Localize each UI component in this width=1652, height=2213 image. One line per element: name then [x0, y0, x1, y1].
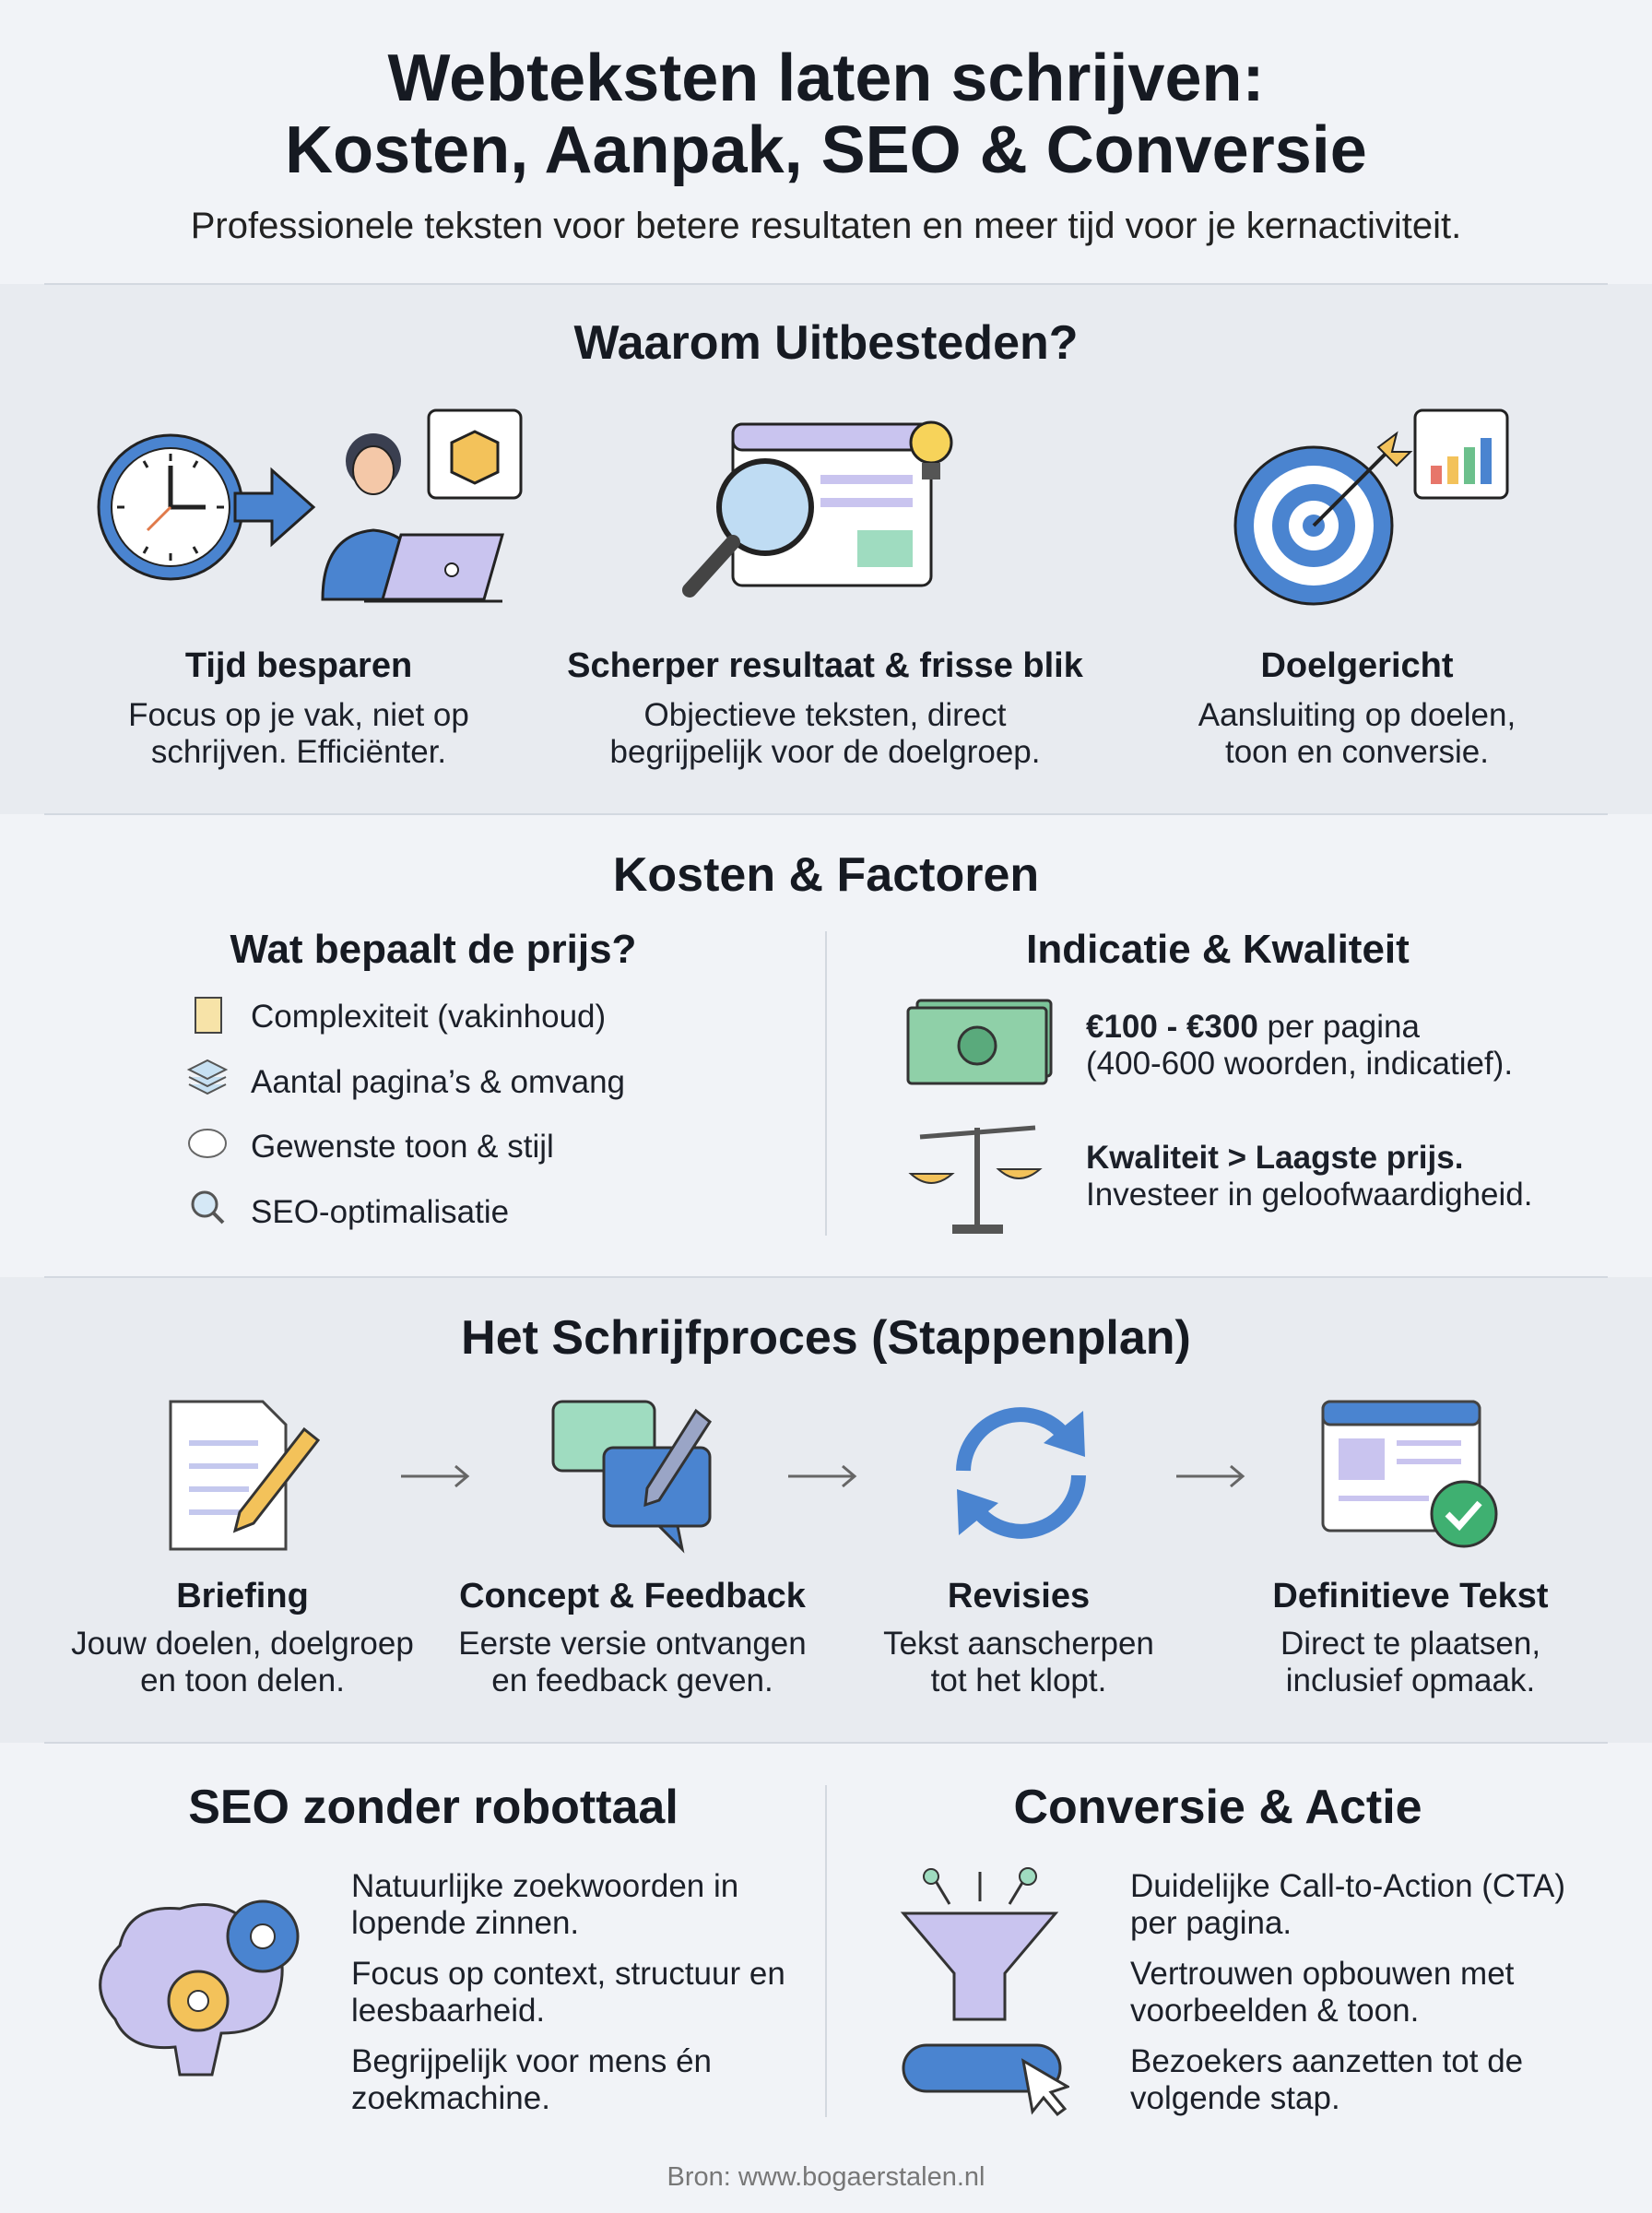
panel: SEO zonder robottaal: lopende zinnen.	[351, 1905, 579, 1941]
step: Concept & Feedback: Eerste versie ontvangen	[458, 1626, 807, 1662]
panel: Conversie & Actie: Bezoekers aanzetten tot de	[1130, 2043, 1523, 2079]
icon: clock with person	[98, 409, 522, 603]
item: Doelgericht	[1198, 646, 1516, 770]
panel: wat bepaalt de prijs	[186, 927, 636, 1230]
item: Scherper resultaat: Scherper resultaat & frisse blik	[567, 646, 1083, 685]
step: Definitieve Tekst: inclusief opmaak.	[1286, 1663, 1535, 1698]
panel: indicatie & kwaliteit: Kwaliteit > Laagste prijs.	[1086, 1140, 1463, 1176]
step: Briefing: Briefing	[176, 1577, 309, 1615]
step: Revisies: Tekst aanscherpen	[883, 1626, 1154, 1662]
panel: Conversie & Actie: volgende stap.	[1130, 2080, 1340, 2116]
step: Briefing	[71, 1577, 414, 1698]
item: Doelgericht: Aansluiting op doelen,	[1198, 697, 1516, 733]
panel: SEO zonder robottaal: Focus op context, structuur en	[351, 1956, 785, 1992]
step: Concept & Feedback: Concept & Feedback	[459, 1577, 806, 1615]
item: Tijd besparen: Focus op je vak, niet op	[128, 697, 469, 733]
panel: indicatie & kwaliteit: Indicatie & Kwaliteit	[1026, 927, 1410, 972]
panel: SEO zonder robottaal: Natuurlijke zoekwoorden in	[351, 1868, 738, 1904]
icon: definitieve tekst browser	[1322, 1400, 1497, 1547]
step: Revisies: Revisies	[948, 1577, 1090, 1615]
panel: SEO zonder robottaal: SEO zonder robottaal	[188, 1781, 678, 1834]
arrows between steps	[401, 1465, 1245, 1487]
item: Scherper resultaat	[567, 646, 1083, 770]
step: Definitieve Tekst: Definitieve Tekst	[1272, 1577, 1549, 1615]
item: Scherper resultaat: begrijpelijk voor de doelgroep.	[610, 734, 1040, 770]
panel: Conversie & Actie: voorbeelden & toon.	[1130, 1993, 1419, 2029]
panel: wat bepaalt de prijs: Complexiteit (vakinhoud)	[251, 999, 606, 1035]
icon: briefing document	[170, 1400, 320, 1551]
icon: magnifier over browser	[682, 420, 953, 598]
panel: indicatie & kwaliteit: €100 - €300 per pagina	[1086, 1009, 1420, 1045]
step: Definitieve Tekst: Direct te plaatsen,	[1280, 1626, 1540, 1662]
title: Webteksten laten schrijven:	[387, 41, 1264, 115]
panel: Conversie & Actie: per pagina.	[1130, 1905, 1292, 1941]
step: Definitieve Tekst	[1272, 1577, 1549, 1698]
step: Concept & Feedback	[458, 1577, 807, 1698]
item: Tijd besparen: schrijven. Efficiënter.	[151, 734, 446, 770]
heading: Het Schrijfproces: Het Schrijfproces (Stappenplan)	[461, 1311, 1191, 1365]
panel: wat bepaalt de prijs: SEO-optimalisatie	[251, 1194, 509, 1230]
panel: SEO zonder robottaal: leesbaarheid.	[351, 1993, 545, 2029]
panel: Conversie & Actie: Conversie & Actie	[1013, 1781, 1422, 1834]
panel: SEO zonder robottaal	[99, 1781, 785, 2116]
item: Doelgericht: toon en conversie.	[1225, 734, 1489, 770]
step: Briefing: en toon delen.	[140, 1663, 345, 1698]
panel: Conversie & Actie	[900, 1781, 1565, 2116]
icon: target with chart	[1233, 409, 1508, 605]
panel: SEO zonder robottaal: Begrijpelijk voor mens én	[351, 2043, 712, 2079]
icon: concept chat	[551, 1400, 712, 1553]
step: Revisies: tot het klopt.	[931, 1663, 1106, 1698]
footer source: Bron: www.bogaerstalen.nl	[667, 2162, 985, 2192]
heading: Kosten & Factoren: Kosten & Factoren	[613, 848, 1039, 902]
step: Briefing: Jouw doelen, doelgroep	[71, 1626, 414, 1662]
panel: Conversie & Actie: Duidelijke Call-to-Action (CTA)	[1130, 1868, 1565, 1904]
subtitle: Professionele teksten voor betere resultaten en meer tijd voor je kernactiviteit.	[191, 206, 1461, 246]
panel: indicatie & kwaliteit: (400-600 woorden, indicatief).	[1086, 1046, 1513, 1082]
heading: Waarom Uitbesteden: Waarom Uitbesteden?	[573, 316, 1079, 370]
step: Revisies	[883, 1577, 1154, 1698]
title: Kosten, Aanpak, SEO & Conversie	[285, 113, 1367, 187]
item: Scherper resultaat: Objectieve teksten, direct	[644, 697, 1006, 733]
icon: revisies cycle	[956, 1407, 1086, 1539]
panel: Conversie & Actie: Vertrouwen opbouwen met	[1130, 1956, 1514, 1992]
item: Doelgericht: Doelgericht	[1260, 646, 1454, 685]
title	[285, 41, 1367, 187]
panel: SEO zonder robottaal: zoekmachine.	[351, 2080, 550, 2116]
item: Tijd besparen	[128, 646, 469, 770]
panel: wat bepaalt de prijs: Aantal pagina’s & omvang	[251, 1064, 625, 1100]
panel: indicatie & kwaliteit: Investeer in geloofwaardigheid.	[1086, 1177, 1532, 1213]
item: Tijd besparen: Tijd besparen	[185, 646, 412, 685]
panel: indicatie & kwaliteit	[907, 927, 1532, 1234]
panel: wat bepaalt de prijs: Gewenste toon & stijl	[251, 1129, 554, 1165]
step: Concept & Feedback: en feedback geven.	[491, 1663, 773, 1698]
panel: wat bepaalt de prijs: Wat bepaalt de prijs?	[230, 927, 636, 972]
